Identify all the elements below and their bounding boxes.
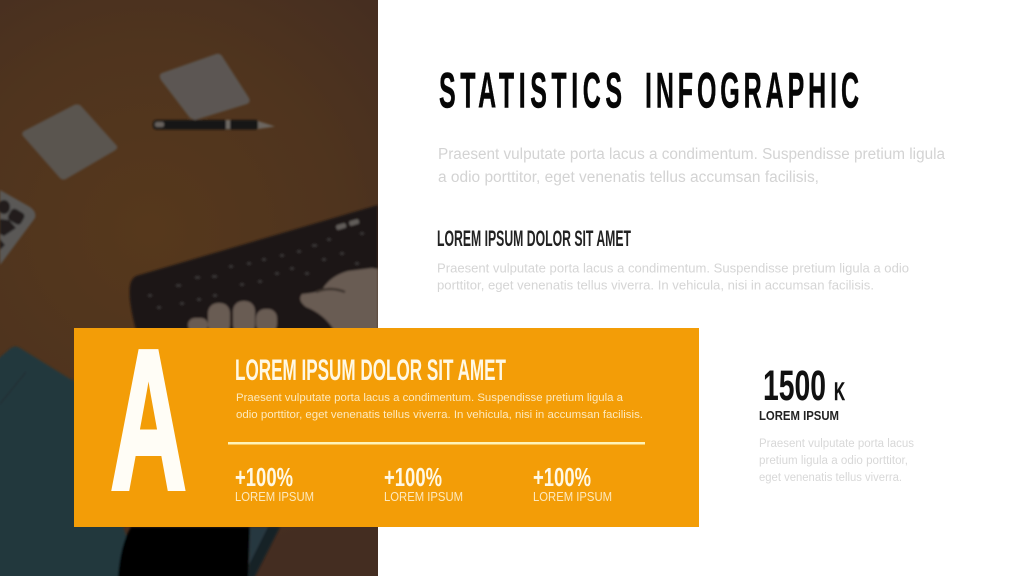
dark sleeve <box>118 527 250 576</box>
tablet <box>0 346 140 576</box>
stat 3 <box>533 462 612 504</box>
card heading: LOREM IPSUM DOLOR SIT AMET <box>235 354 506 387</box>
calculator <box>0 190 35 265</box>
side statistic: 1500 K: K <box>834 378 845 406</box>
keyboard <box>130 205 378 330</box>
card paragraph <box>236 392 643 421</box>
stat 2: +100% <box>384 462 442 492</box>
card paragraph: Praesent vulputate porta lacus a condimentum. Suspendisse pretium ligula a <box>236 392 624 404</box>
stat 3: +100% <box>533 462 591 492</box>
side statistic: 1500 K: 1500 <box>763 362 826 410</box>
intro paragraph: a odio porttitor, eget venenatis tellus accumsan facilisis, <box>438 169 819 186</box>
card divider <box>228 442 645 444</box>
tablet corner <box>249 527 268 565</box>
section paragraph <box>437 262 909 292</box>
stat 3: LOREM IPSUM <box>533 490 612 504</box>
section paragraph: porttitor, eget venenatis tellus viverra. In vehicula, nisi in accumsan facilisis. <box>437 278 874 292</box>
side statistic paragraph <box>759 438 914 484</box>
stat 1: +100% <box>235 462 293 492</box>
tablet corner shadow <box>248 527 280 576</box>
section heading: LOREM IPSUM DOLOR SIT AMET <box>437 226 631 251</box>
main title <box>439 63 859 119</box>
panel: background photo of a desk <box>0 0 378 576</box>
main title: INFOGRAPHIC <box>645 63 859 119</box>
side statistic paragraph: eget venenatis tellus viverra. <box>759 472 902 484</box>
side statistic paragraph: pretium ligula a odio porttitor, <box>759 455 908 467</box>
stat 1: LOREM IPSUM <box>235 490 314 504</box>
intro paragraph <box>438 146 945 186</box>
side statistic label: LOREM IPSUM <box>759 409 839 423</box>
stat 2 <box>384 462 463 504</box>
card paragraph: odio porttitor, eget venenatis tellus viverra. In vehicula, nisi in accumsan facilisis. <box>236 409 643 421</box>
sticky note left <box>22 104 117 180</box>
hands on keyboard <box>188 268 378 335</box>
stat 2: LOREM IPSUM <box>384 490 463 504</box>
big letter A: A <box>110 310 186 532</box>
main title: STATISTICS <box>439 63 622 119</box>
pen <box>153 120 275 130</box>
section paragraph: Praesent vulputate porta lacus a condimentum. Suspendisse pretium ligula a odio <box>437 262 909 276</box>
panel: orange feature card <box>74 310 699 532</box>
intro paragraph: Praesent vulputate porta lacus a condimentum. Suspendisse pretium ligula <box>438 146 945 163</box>
side statistic paragraph: Praesent vulputate porta lacus <box>759 438 914 450</box>
tablet edge line <box>0 372 26 404</box>
sticky note right <box>160 54 250 120</box>
stat 1 <box>235 462 314 504</box>
